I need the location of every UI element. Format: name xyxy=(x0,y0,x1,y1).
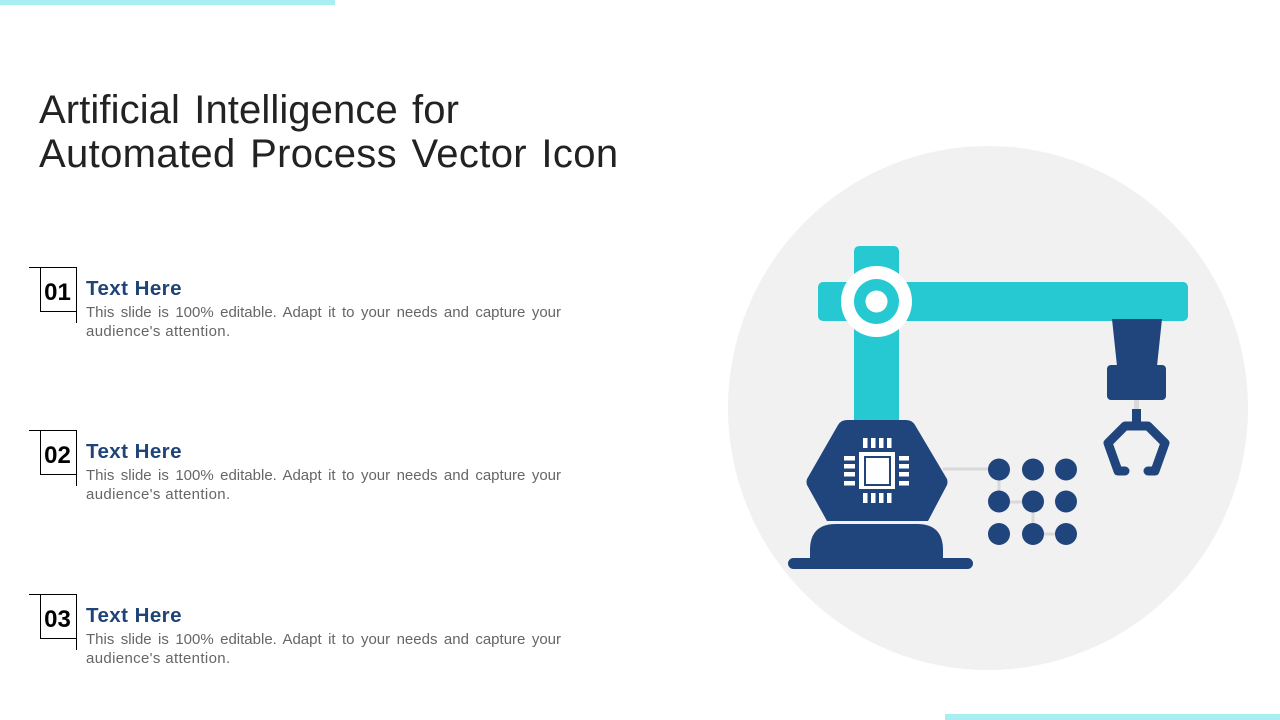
icon: node grid xyxy=(988,458,1077,545)
number badge 01: 01 xyxy=(44,279,71,306)
icon: base foot xyxy=(788,558,973,569)
description 03: audience's attention. xyxy=(86,650,230,667)
list item 03 xyxy=(29,594,561,667)
number badge 02 xyxy=(40,430,77,475)
connector lines xyxy=(943,469,1066,534)
description 02: This slide is 100% editable. Adapt it to your needs and capture your xyxy=(86,467,561,484)
icon: hexagon head xyxy=(806,420,948,521)
description 01: This slide is 100% editable. Adapt it to your needs and capture your xyxy=(86,304,561,321)
bottom accent bar xyxy=(945,714,1280,720)
heading 03: Text Here xyxy=(86,604,182,627)
heading 02: Text Here xyxy=(86,440,182,463)
number badge 03 xyxy=(40,594,77,639)
description 03 xyxy=(86,631,561,667)
icon: gripper xyxy=(1107,319,1166,471)
top accent bar xyxy=(0,0,335,5)
description 02 xyxy=(86,467,561,503)
icon: robot arm beam xyxy=(818,282,1188,321)
title xyxy=(39,88,618,176)
number badge 03: 03 xyxy=(44,606,71,633)
list item 01 xyxy=(29,267,561,340)
description 01: audience's attention. xyxy=(86,323,230,340)
number badge 01 xyxy=(40,267,77,312)
number badge 02: 02 xyxy=(44,442,71,469)
icon: robot base xyxy=(810,524,943,560)
title: Automated Process Vector Icon xyxy=(39,132,618,176)
description 02: audience's attention. xyxy=(86,486,230,503)
heading 01: Text Here xyxy=(86,277,182,300)
list item 02 xyxy=(29,430,561,503)
icon: robot arm column xyxy=(854,246,899,426)
icon: processor chip xyxy=(844,438,909,503)
title: Artificial Intelligence for xyxy=(39,88,459,132)
icon: arm joint xyxy=(841,266,912,337)
background circle xyxy=(728,146,1248,670)
description 03: This slide is 100% editable. Adapt it to your needs and capture your xyxy=(86,631,561,648)
description 01 xyxy=(86,304,561,340)
